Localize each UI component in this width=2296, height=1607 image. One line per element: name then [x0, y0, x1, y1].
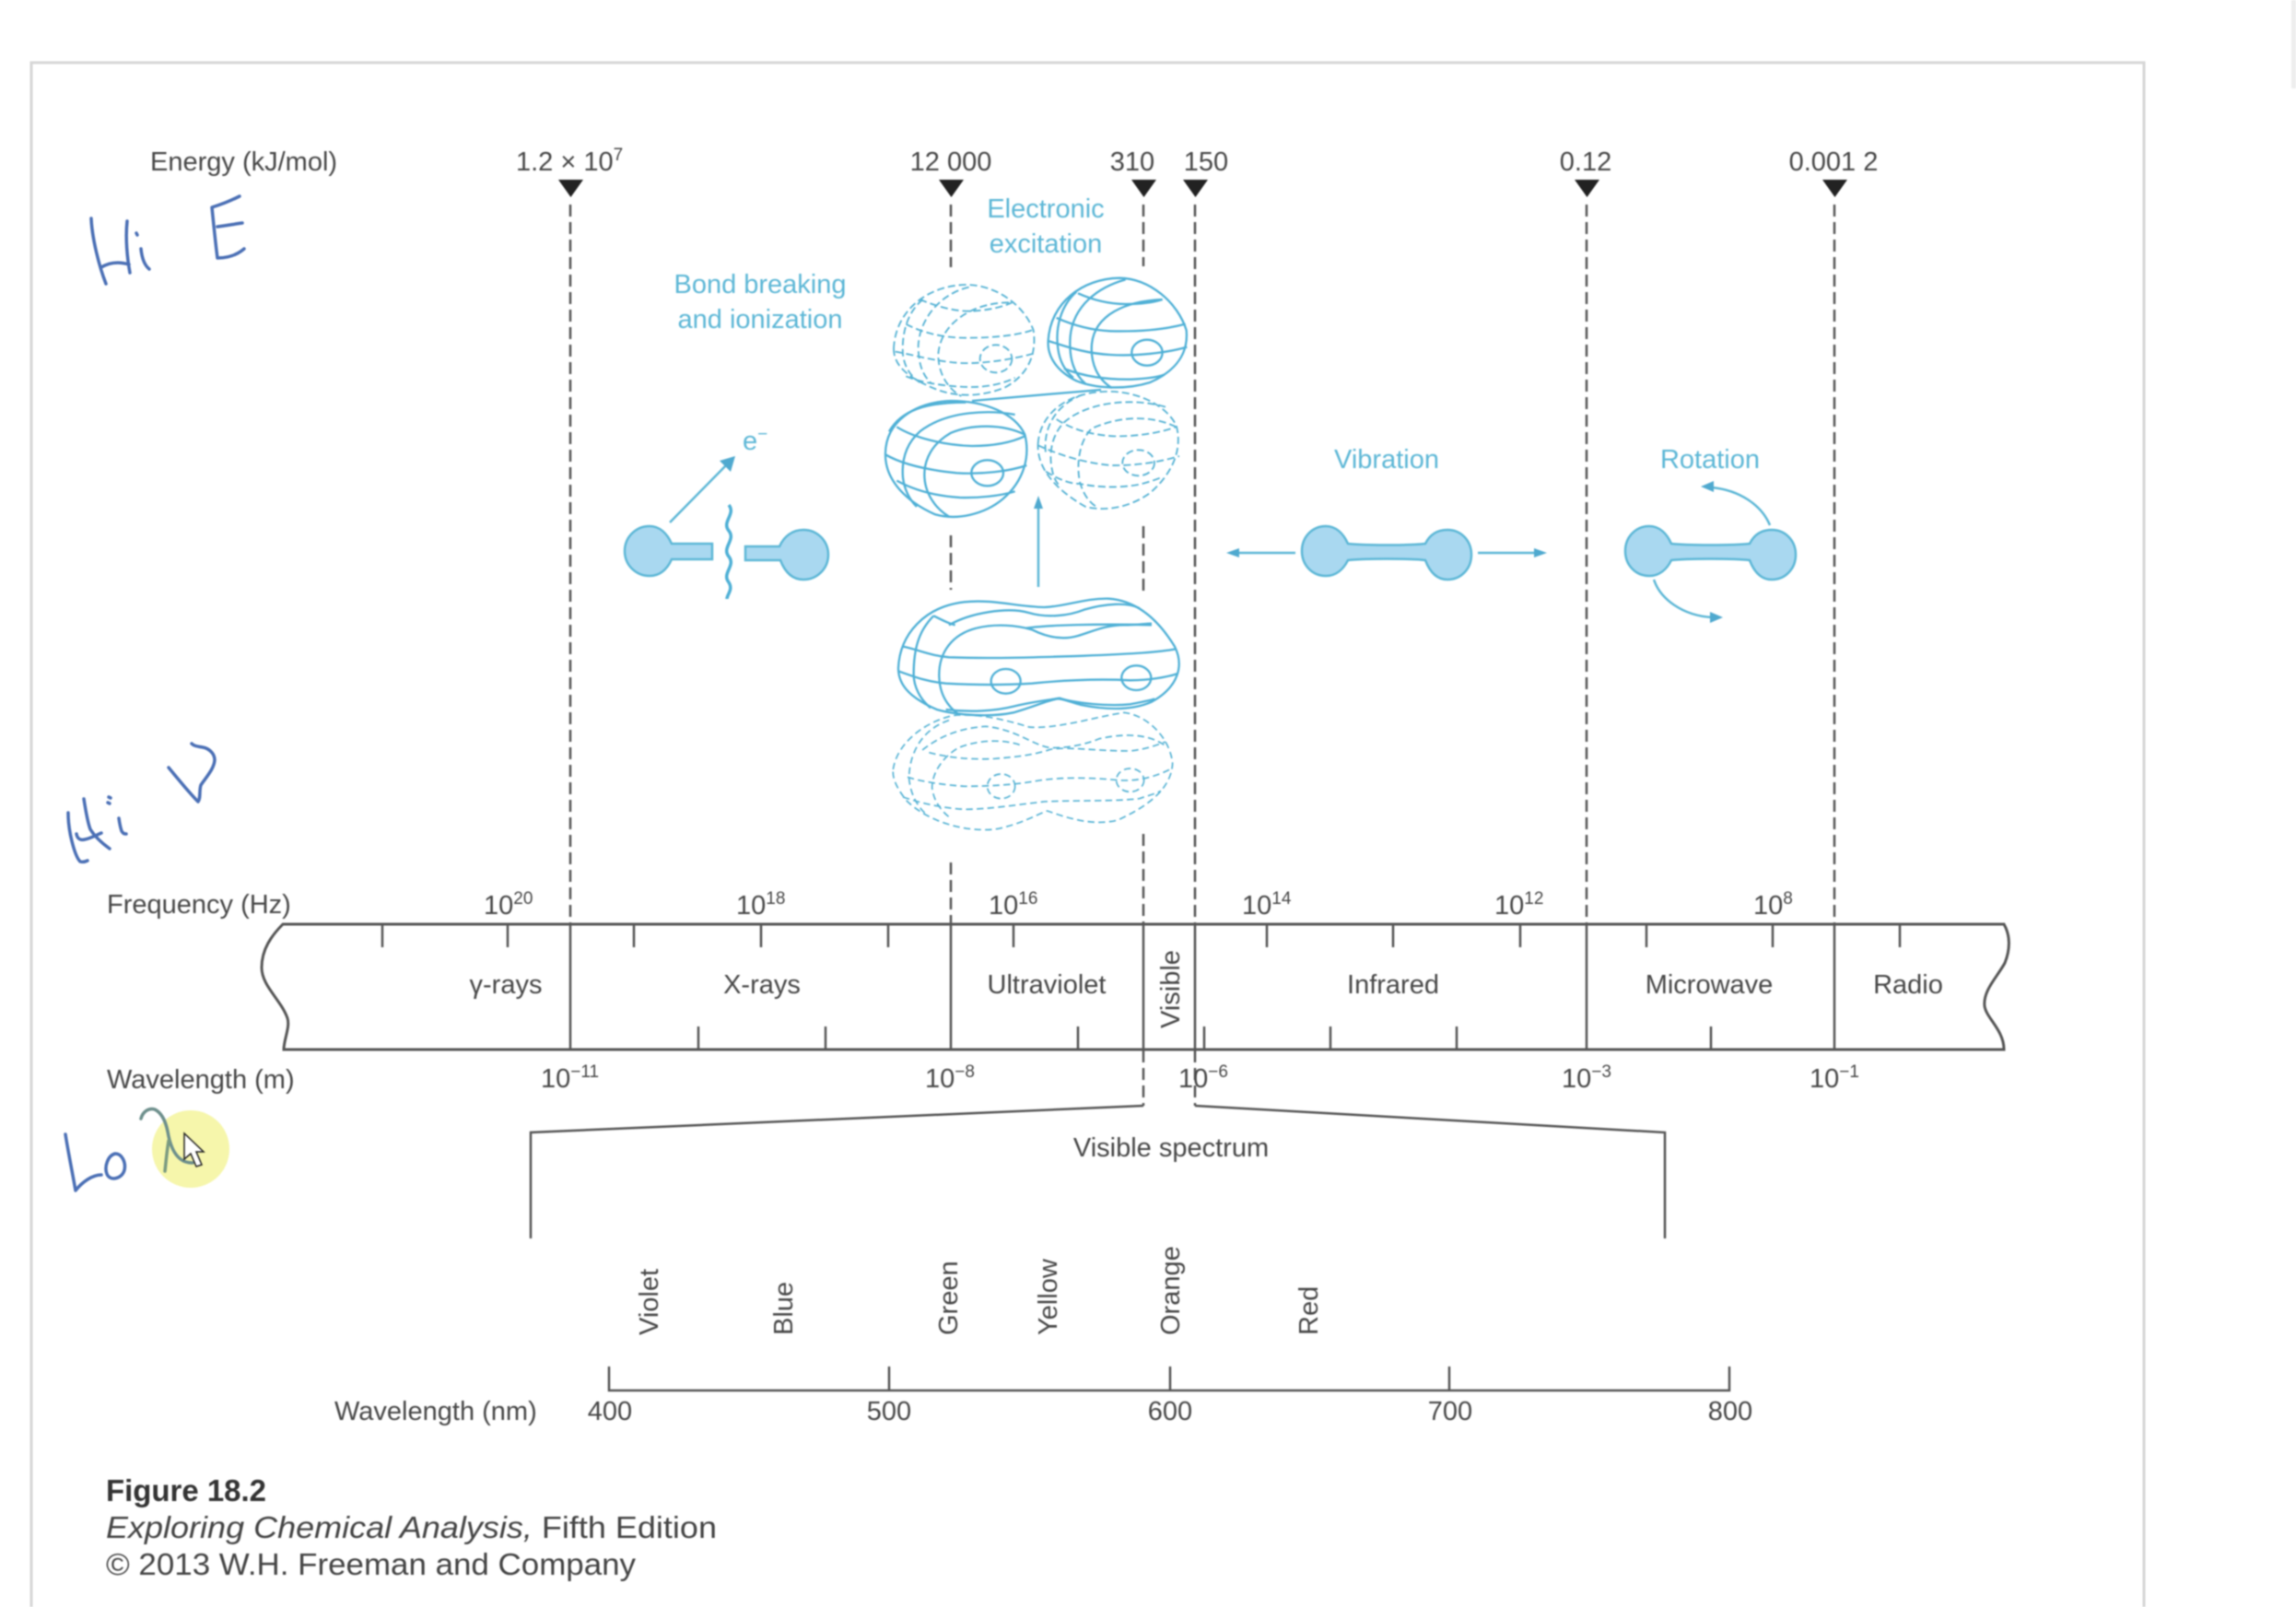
heading: bond breaking: Bond breaking	[674, 270, 847, 299]
wavelength nm axis	[334, 1367, 1752, 1426]
icon: molecular orbitals lower	[893, 599, 1179, 830]
electron label: e	[743, 427, 757, 456]
visible spectrum bracket	[531, 1106, 1665, 1238]
wavelength m labels: Wavelength (m)	[107, 1065, 295, 1095]
frequency labels	[107, 889, 1793, 921]
break wave	[727, 505, 731, 599]
wavelength nm axis: 500	[867, 1397, 911, 1426]
frequency labels: 16	[1018, 889, 1037, 909]
dashed lower lobe	[893, 712, 1173, 830]
heading: bond breaking: and ionization	[678, 305, 842, 334]
frequency labels: 10	[1494, 891, 1524, 921]
wavelength m labels: 10	[925, 1064, 955, 1094]
figure caption: Figure 18.2	[106, 1473, 266, 1507]
wavelength m labels: −8	[955, 1062, 975, 1082]
right fragment	[745, 530, 828, 580]
frequency labels: 10	[1242, 891, 1271, 921]
frequency labels: 18	[766, 889, 785, 909]
band dividers	[570, 924, 1834, 1050]
figure caption	[106, 1473, 717, 1581]
colour labels: Yellow	[1034, 1258, 1063, 1335]
label: vibration: Vibration	[1334, 445, 1439, 475]
microwave label: Microwave	[1646, 970, 1773, 1000]
frequency labels: 10	[736, 891, 766, 921]
colour labels: Orange	[1156, 1246, 1186, 1335]
colour labels	[635, 1246, 1324, 1335]
lower arrow	[1654, 580, 1712, 617]
spectrum bar	[262, 924, 2009, 1050]
wavelength m labels: −11	[570, 1062, 599, 1082]
wavelength m labels: 10	[1810, 1064, 1839, 1094]
bar outline	[262, 924, 2009, 1050]
gamma label: γ-rays	[470, 970, 542, 1000]
wavelength m labels	[107, 1062, 1859, 1095]
heading: electronic excitation: Electronic	[987, 194, 1105, 224]
colour labels: Green	[934, 1261, 964, 1335]
icon: rotating molecule	[1625, 481, 1796, 623]
wavelength nm axis: 700	[1428, 1397, 1472, 1426]
energy value 310: 310	[1110, 147, 1154, 177]
frequency labels: 12	[1524, 889, 1543, 909]
solid upper lobe	[898, 599, 1179, 715]
visible label: Visible	[1156, 950, 1186, 1028]
wavelength nm axis: 800	[1708, 1397, 1752, 1426]
dashed energy guide lines	[570, 205, 1834, 1106]
upper arrow	[1712, 487, 1770, 525]
energy markers	[558, 180, 1847, 197]
wavelength m labels: −1	[1839, 1062, 1859, 1082]
wavelength m labels: 10	[1178, 1064, 1208, 1094]
label: energy: Energy (kJ/mol)	[150, 147, 337, 177]
energy value 0.0012: 0.001 2	[1789, 147, 1878, 177]
frequency labels: 10	[484, 891, 513, 921]
energy value 1.2e7: 1.2 × 10	[516, 147, 614, 177]
handwriting: Hi nu	[68, 744, 215, 862]
x-ray label: X-rays	[723, 970, 801, 1000]
ticks	[382, 924, 1900, 1050]
icon: molecular orbitals upper	[885, 278, 1187, 517]
cursor highlight	[152, 1110, 229, 1188]
colour labels: Blue	[769, 1282, 799, 1335]
energy value 0.12: 0.12	[1560, 147, 1611, 177]
frequency labels: 14	[1271, 889, 1292, 909]
figure caption: Exploring Chemical Analysis, Fifth Edition	[106, 1510, 717, 1544]
handwriting: Lo lambda	[65, 1108, 193, 1191]
left fragment	[625, 526, 712, 576]
frequency labels: 20	[513, 889, 533, 909]
solid lower left lobe	[885, 401, 1026, 517]
frequency labels: 8	[1783, 889, 1793, 909]
infrared label: Infrared	[1347, 970, 1439, 1000]
wavelength nm axis: 600	[1148, 1397, 1192, 1426]
heading: electronic excitation	[987, 194, 1105, 259]
handwriting: Hi E	[91, 196, 244, 284]
energy axis labels	[150, 146, 1878, 177]
heading: bond breaking	[674, 270, 847, 334]
connector	[972, 390, 1101, 401]
heading: electronic excitation: excitation	[990, 229, 1102, 259]
wavelength m labels: −6	[1208, 1062, 1228, 1082]
ejected electron arrow	[670, 456, 735, 522]
icon: bond breaking molecule	[625, 425, 828, 599]
cursor arrow	[184, 1133, 204, 1167]
frequency labels: Frequency (Hz)	[107, 890, 291, 920]
electron label: −	[757, 425, 767, 444]
wavelength m labels: −3	[1591, 1062, 1611, 1082]
solid upper right lobe	[1048, 278, 1187, 388]
wavelength nm axis: 400	[588, 1397, 632, 1426]
arrow: excitation	[1034, 496, 1043, 587]
wavelength m labels: 10	[1562, 1064, 1591, 1094]
colour labels: Red	[1294, 1286, 1324, 1335]
wavelength m labels: 10	[541, 1064, 570, 1094]
frequency labels: 10	[989, 891, 1018, 921]
radio label: Radio	[1873, 970, 1943, 1000]
dashed lower right lobe	[1038, 392, 1179, 509]
wavelength nm axis: Wavelength (nm)	[334, 1397, 537, 1426]
ultraviolet label: Ultraviolet	[988, 970, 1106, 1000]
energy value 150: 150	[1184, 147, 1228, 177]
right arrow	[1478, 552, 1537, 554]
label: rotation: Rotation	[1660, 445, 1760, 475]
frequency labels: 10	[1753, 891, 1783, 921]
icon: vibrating molecule	[1226, 526, 1547, 580]
left arrow	[1236, 552, 1295, 554]
energy value 1.2e7: 7	[614, 146, 623, 165]
scrollbar fragment	[2291, 0, 2296, 88]
label: visible spectrum: Visible spectrum	[1073, 1133, 1269, 1163]
colour labels: Violet	[635, 1269, 664, 1335]
dashed upper left lobe	[894, 285, 1035, 396]
figure caption: © 2013 W.H. Freeman and Company	[106, 1547, 637, 1581]
energy value 12000: 12 000	[910, 147, 991, 177]
